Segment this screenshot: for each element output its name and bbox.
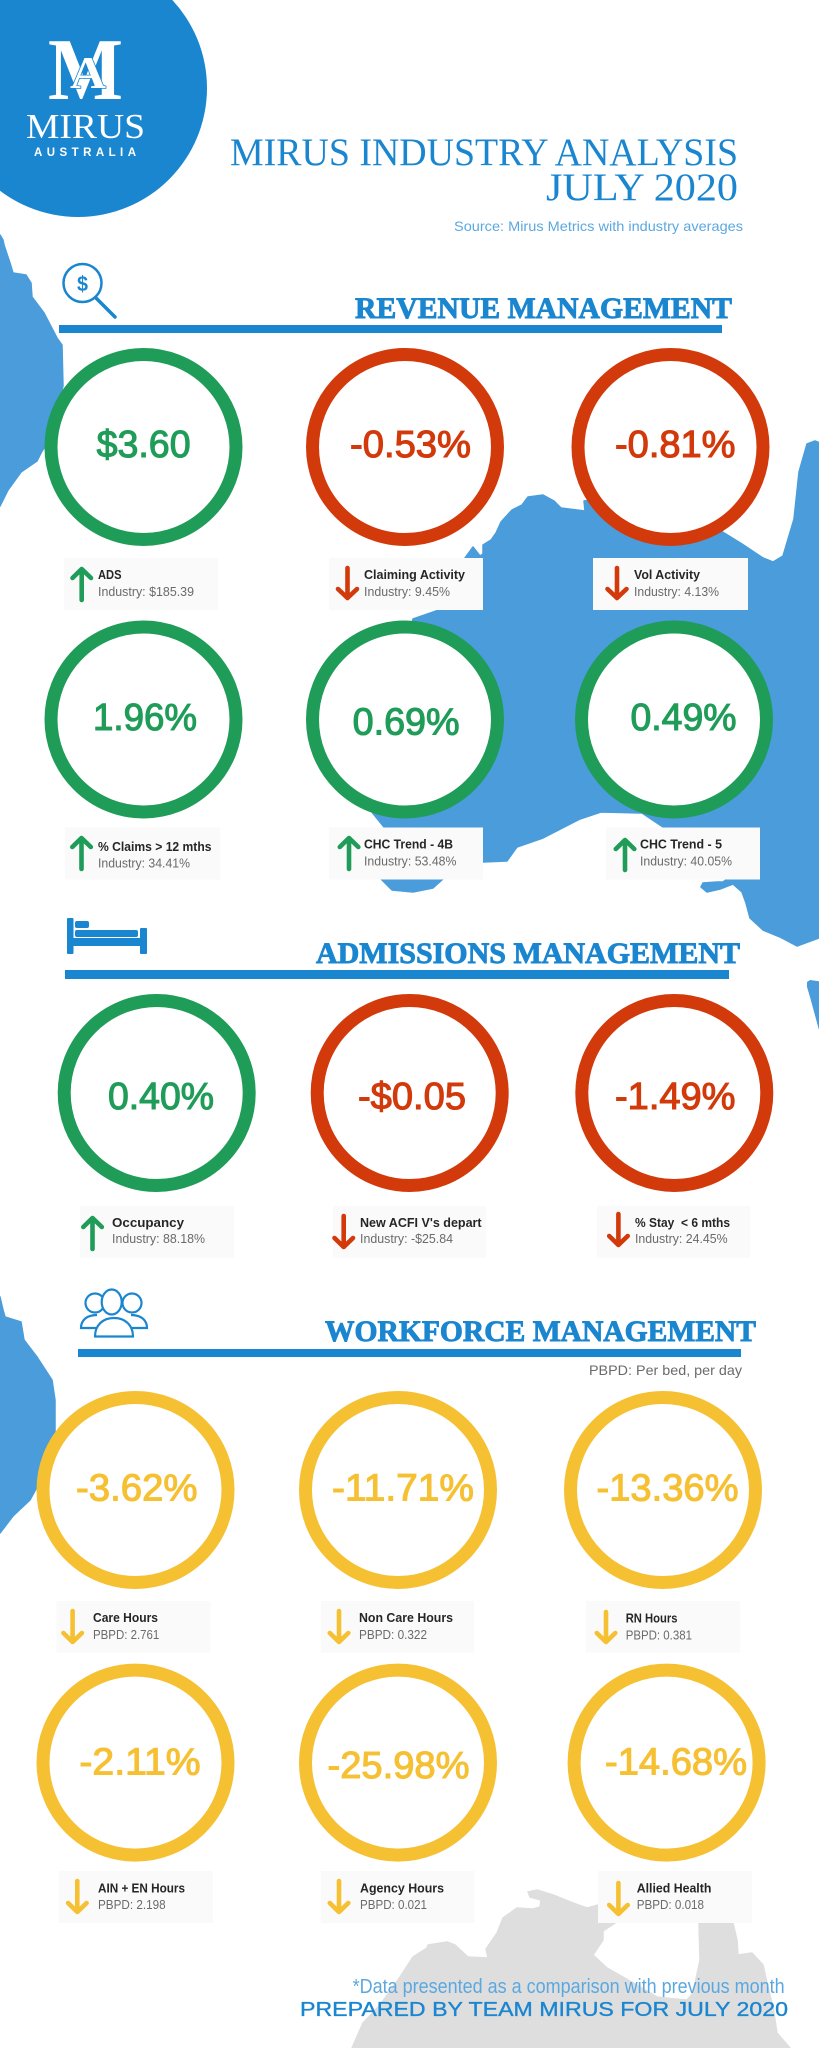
- ring: [51, 627, 236, 812]
- title: [230, 131, 738, 209]
- label: New ACFI V's depart: [360, 1216, 482, 1230]
- legend box: [329, 558, 483, 610]
- down arrow: [338, 568, 357, 598]
- logo wordmark: MIRUS: [26, 107, 145, 146]
- value: -3.62%: [76, 1467, 198, 1509]
- industry figure: Industry: 24.45%: [635, 1231, 728, 1246]
- ring: [64, 1000, 249, 1186]
- note: PBPD definition: PBPD: Per bed, per day: [589, 1362, 742, 1378]
- metric: CHC Trend - 4B: [312, 627, 498, 880]
- background map: grey northern australia: [352, 1890, 790, 2048]
- legend box: [606, 828, 760, 880]
- down arrow: [63, 1611, 82, 1642]
- label: CHC Trend - 4B: [364, 838, 453, 852]
- value: 0.69%: [353, 702, 460, 744]
- ring: [574, 1670, 759, 1855]
- metric: Agency Hours: [306, 1670, 490, 1923]
- label: ADS: [98, 568, 122, 582]
- background map: right edge sliver: [807, 980, 819, 1040]
- title: JULY 2020: [546, 166, 738, 209]
- down arrow: [608, 568, 626, 598]
- label: Allied Health: [637, 1882, 711, 1896]
- value: -13.36%: [596, 1467, 738, 1509]
- down arrow: [609, 1883, 628, 1914]
- logo monogram: M: [48, 22, 123, 119]
- metric: % Stay < 6 mths: [582, 1000, 767, 1258]
- label: Occupancy: [112, 1216, 184, 1230]
- icon: bed: [67, 918, 147, 954]
- label: RN Hours: [626, 1612, 678, 1626]
- ring: [43, 1670, 228, 1855]
- metric: Occupancy: [64, 1000, 249, 1258]
- heading: workforce management: WORKFORCE MANAGEMENT: [325, 1315, 756, 1348]
- legend box: [597, 1206, 751, 1258]
- value: -0.53%: [350, 424, 471, 466]
- ring: [570, 1398, 756, 1582]
- ring: [306, 1670, 490, 1855]
- icon: magnifier with dollar: [64, 264, 115, 317]
- legend box: [80, 1206, 234, 1258]
- value: -0.81%: [615, 424, 736, 466]
- metric: Allied Health: [574, 1670, 759, 1923]
- industry figure: Industry: 4.13%: [634, 584, 719, 599]
- up arrow: [340, 838, 358, 869]
- industry figure: Industry: 40.05%: [640, 853, 732, 868]
- value: -25.98%: [328, 1745, 470, 1787]
- legend box: [64, 558, 218, 610]
- metric: CHC Trend - 5: [582, 627, 766, 880]
- pbpd figure: PBPD: 0.381: [626, 1628, 692, 1642]
- label: % Claims > 12 mths: [98, 840, 212, 854]
- logo badge: [0, 0, 207, 217]
- down arrow: [330, 1881, 348, 1912]
- ring: [312, 354, 498, 540]
- legend box: [321, 1871, 474, 1923]
- background map: lower left coast: [0, 1290, 55, 1536]
- legend box: [329, 828, 483, 880]
- metric: ADS: [51, 354, 236, 610]
- legend box: [333, 1206, 486, 1258]
- legend box: [321, 1601, 474, 1652]
- metric: % Claims > 12 mths: [51, 627, 236, 880]
- industry figure: Industry: -$25.84: [360, 1231, 453, 1246]
- metric: New ACFI V's depart: [317, 1000, 502, 1258]
- industry figure: Industry: 9.45%: [364, 584, 450, 599]
- panel: revenue management: [51, 264, 766, 880]
- footnote: *Data presented as a comparison with previous month: [353, 1976, 785, 1998]
- legend box: [598, 1871, 752, 1923]
- ring: [578, 354, 763, 540]
- down arrow: [68, 1881, 87, 1912]
- title: MIRUS INDUSTRY ANALYSIS: [230, 131, 738, 174]
- background map: western australia: [371, 441, 819, 946]
- pbpd figure: PBPD: 0.018: [637, 1897, 704, 1912]
- pbpd figure: PBPD: 2.761: [93, 1627, 159, 1642]
- down arrow: [334, 1216, 353, 1247]
- industry figure: Industry: 53.48%: [364, 853, 457, 868]
- legend box: [58, 1871, 213, 1923]
- industry figure: Industry: 34.41%: [98, 856, 190, 870]
- label: Agency Hours: [360, 1882, 444, 1896]
- ring: [306, 1398, 490, 1582]
- label: % Stay < 6 mths: [635, 1216, 730, 1230]
- ring: [312, 627, 498, 812]
- ring: [582, 627, 766, 812]
- up arrow: [72, 838, 91, 869]
- icon: people: [81, 1290, 147, 1336]
- metric: Vol Activity: [578, 354, 763, 610]
- label: Claiming Activity: [364, 568, 465, 582]
- panel: workforce management: [43, 1290, 759, 1923]
- legend box: [56, 1601, 210, 1652]
- logo monogram: A: [70, 47, 106, 98]
- metric: AIN + EN Hours: [43, 1670, 228, 1923]
- ring: [317, 1000, 502, 1186]
- label: CHC Trend - 5: [640, 838, 722, 852]
- value: 0.40%: [108, 1076, 214, 1118]
- ring: [582, 1000, 767, 1186]
- metric: Non Care Hours: [306, 1398, 490, 1652]
- label: Non Care Hours: [359, 1611, 453, 1625]
- heading rule: [65, 970, 729, 979]
- value: -11.71%: [332, 1467, 474, 1509]
- label: AIN + EN Hours: [98, 1882, 185, 1896]
- down arrow: [597, 1612, 615, 1642]
- value: -14.68%: [605, 1741, 747, 1783]
- heading: revenue management: REVENUE MANAGEMENT: [355, 292, 732, 325]
- heading rule: [59, 325, 722, 333]
- source note: Source: Mirus Metrics with industry averages: [454, 218, 743, 234]
- metric: Care Hours: [43, 1398, 228, 1652]
- up arrow: [72, 569, 91, 600]
- footer credit: PREPARED BY TEAM MIRUS FOR JULY 2020: [300, 1999, 788, 2021]
- pbpd figure: PBPD: 2.198: [98, 1897, 166, 1912]
- value: 1.96%: [93, 697, 197, 739]
- value: $3.60: [97, 424, 191, 466]
- down arrow: [609, 1214, 628, 1245]
- legend box: [65, 828, 220, 880]
- industry figure: Industry: $185.39: [98, 584, 194, 599]
- metric: RN Hours: [570, 1398, 756, 1652]
- value: -2.11%: [79, 1741, 201, 1783]
- label: Vol Activity: [634, 568, 700, 582]
- ring: [43, 1398, 228, 1582]
- legend box: [593, 558, 748, 610]
- value: -1.49%: [615, 1076, 736, 1118]
- ring: [51, 354, 236, 540]
- heading: admissions management: ADMISSIONS MANAGEMENT: [316, 937, 740, 970]
- value: -$0.05: [358, 1076, 466, 1118]
- label: Care Hours: [93, 1611, 158, 1625]
- up arrow: [83, 1218, 102, 1249]
- legend box: [586, 1601, 740, 1652]
- up arrow: [616, 840, 634, 870]
- metric: Claiming Activity: [312, 354, 498, 610]
- logo sub wordmark: AUSTRALIA: [34, 147, 136, 159]
- panel: admissions management: [64, 918, 767, 1258]
- pbpd figure: PBPD: 0.322: [359, 1627, 427, 1642]
- pbpd figure: PBPD: 0.021: [360, 1897, 427, 1912]
- industry figure: Industry: 88.18%: [112, 1231, 205, 1246]
- down arrow: [330, 1611, 348, 1642]
- heading rule: [78, 1349, 741, 1357]
- icon: magnifier with dollar: $: [77, 273, 88, 296]
- value: 0.49%: [630, 697, 736, 739]
- background map: top left coast: [0, 230, 63, 510]
